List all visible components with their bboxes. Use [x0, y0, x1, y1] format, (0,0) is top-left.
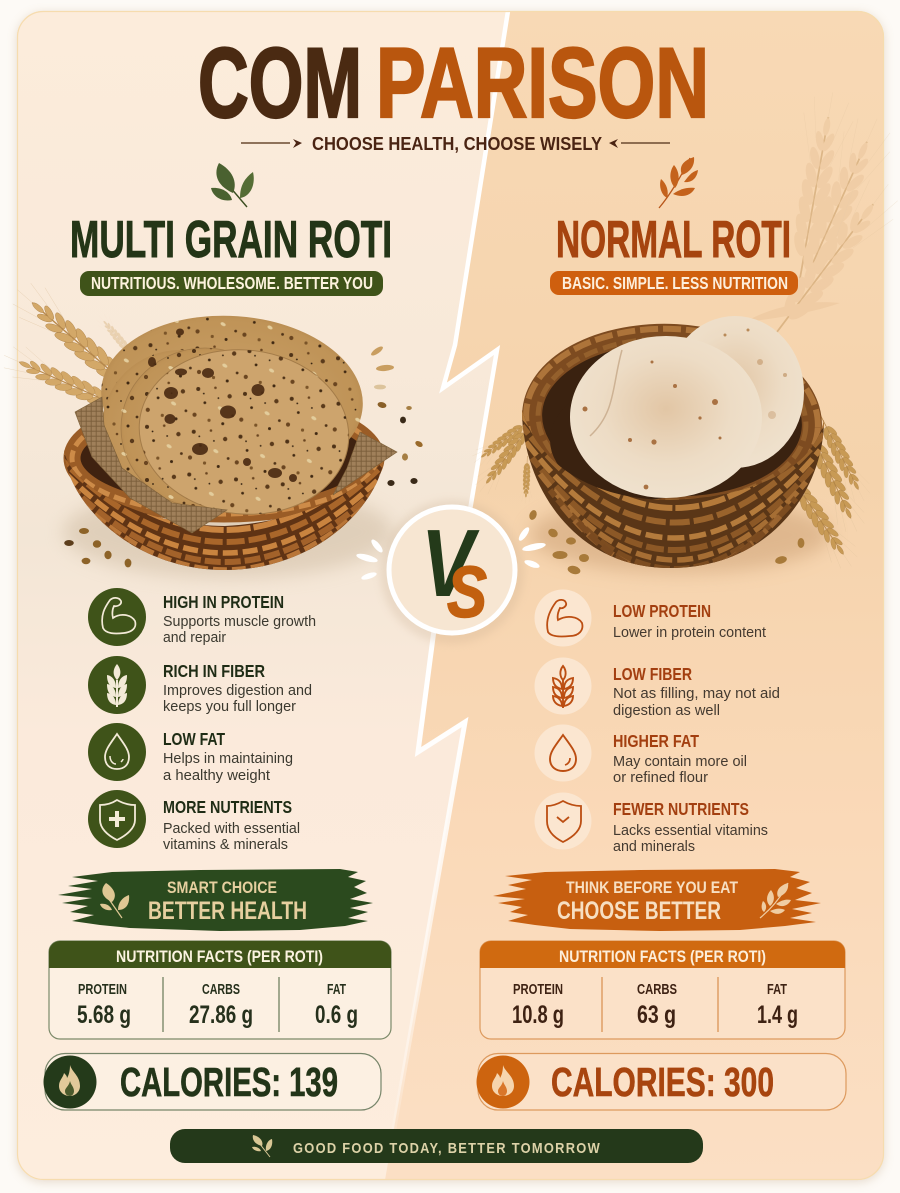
table: multi grain nutrition facts: FAT	[327, 982, 346, 998]
icon: banner sprig	[760, 883, 791, 918]
benefit: more nutrients: vitamins & minerals	[163, 837, 288, 853]
calories: multi grain: CALORIES: 139	[120, 1059, 338, 1105]
tagline pill: multi grain	[80, 271, 383, 296]
table: normal roti nutrition facts: 63 g	[637, 1001, 676, 1029]
benefit: high in protein: and repair	[163, 630, 226, 646]
table: multi grain nutrition facts: 5.68 g	[77, 1001, 131, 1029]
table: multi grain nutrition facts: 0.6 g	[315, 1001, 358, 1029]
benefit: more nutrients: MORE NUTRIENTS	[163, 797, 292, 817]
drawback: low fiber	[534, 658, 780, 719]
tagline pill: normal	[550, 271, 798, 295]
wheat stalks: left	[0, 275, 147, 423]
banner: choose better: THINK BEFORE YOU EAT	[566, 879, 738, 897]
benefit: low fat: LOW FAT	[163, 729, 225, 749]
icon: flame	[59, 1065, 80, 1096]
title: PARISON	[376, 27, 709, 138]
benefit: high in protein: HIGH IN PROTEIN	[163, 592, 284, 612]
drawback: low fiber: Not as filling, may not aid	[613, 686, 780, 702]
table: normal roti nutrition facts: 1.4 g	[757, 1001, 798, 1029]
scattered seeds	[64, 345, 424, 567]
subtitle: CHOOSE HEALTH, CHOOSE WISELY	[312, 134, 602, 154]
table: normal roti nutrition facts: 10.8 g	[512, 1001, 564, 1029]
panel: left background	[17, 11, 508, 1180]
calories: normal: CALORIES: 300	[551, 1059, 774, 1105]
table: normal roti nutrition facts: NUTRITION FACTS (PER ROTI)	[559, 947, 766, 966]
benefit: low fat: Helps in maintaining	[163, 751, 293, 767]
banner: better health: BETTER HEALTH	[148, 897, 307, 925]
drawback: higher fat: May contain more oil	[613, 754, 747, 770]
icon: banner leaf	[100, 883, 129, 918]
benefit: rich in fiber: keeps you full longer	[163, 699, 296, 715]
illustration: normal roti basket	[469, 316, 875, 577]
table: normal roti nutrition facts	[480, 941, 845, 1039]
table: normal roti nutrition facts: PROTEIN	[513, 982, 563, 998]
illustration: multi grain roti basket	[0, 275, 424, 582]
banner: choose better	[493, 869, 821, 931]
basket back	[519, 318, 825, 522]
panel: multi grain benefits	[88, 588, 316, 853]
drawback: low fiber: digestion as well	[613, 703, 720, 719]
background wheat: right	[745, 88, 900, 357]
tagline pill: multi grain: NUTRITIOUS. WHOLESOME. BETTER YOU	[91, 273, 373, 293]
drawback: fewer nutrients	[534, 792, 768, 855]
icon: footer leaf	[252, 1135, 272, 1157]
icon: flame	[492, 1065, 514, 1096]
table: multi grain nutrition facts: NUTRITION FACTS (PER ROTI)	[116, 947, 323, 966]
benefit: rich in fiber: Improves digestion and	[163, 683, 312, 699]
banner: better health	[58, 869, 373, 931]
benefit: rich in fiber: RICH IN FIBER	[163, 661, 265, 681]
burn spots	[148, 328, 297, 482]
benefit: low fat: a healthy weight	[163, 768, 270, 784]
benefit: rich in fiber	[88, 656, 312, 715]
table: multi grain nutrition facts: CARBS	[202, 982, 240, 998]
basket front	[64, 450, 384, 570]
drawback: fewer nutrients: Lacks essential vitamins	[613, 823, 768, 839]
benefit: high in protein: Supports muscle growth	[163, 614, 316, 630]
basket back	[72, 402, 376, 514]
banner: better health: SMART CHOICE	[167, 879, 277, 897]
soft rotis	[570, 316, 804, 498]
benefit: more nutrients	[88, 790, 300, 853]
benefit: high in protein	[88, 588, 316, 646]
title: COM	[198, 27, 362, 138]
drawback: low protein: Lower in protein content	[613, 625, 766, 641]
sparks	[356, 526, 546, 581]
drawback: low protein	[534, 590, 766, 646]
lightning divider	[385, 11, 508, 1180]
heading: multi grain roti: MULTI GRAIN ROTI	[70, 211, 392, 269]
cloth	[75, 397, 397, 533]
title	[198, 27, 709, 138]
wheat stalks: right	[469, 408, 875, 574]
scattered grains	[528, 509, 804, 576]
drawback: higher fat: HIGHER FAT	[613, 731, 699, 751]
drawback: fewer nutrients: FEWER NUTRIENTS	[613, 799, 749, 819]
benefit: more nutrients: Packed with essential	[163, 821, 300, 837]
tagline pill: normal: BASIC. SIMPLE. LESS NUTRITION	[562, 273, 788, 293]
table: multi grain nutrition facts: 27.86 g	[189, 1001, 253, 1029]
table: multi grain nutrition facts	[49, 941, 391, 1039]
VS badge: S	[447, 553, 487, 633]
drawback: low fiber: LOW FIBER	[613, 664, 692, 684]
panel: normal roti drawbacks	[534, 590, 780, 855]
drawback: low protein: LOW PROTEIN	[613, 601, 711, 621]
drawback: higher fat	[534, 724, 747, 786]
table: multi grain nutrition facts: PROTEIN	[78, 982, 127, 998]
VS badge: V	[421, 510, 480, 617]
banner: choose better: CHOOSE BETTER	[557, 897, 721, 925]
drawback: higher fat: or refined flour	[613, 770, 708, 786]
benefit: low fat	[88, 723, 293, 784]
calories: multi grain	[44, 1054, 381, 1110]
footer banner: GOOD FOOD TODAY, BETTER TOMORROW	[293, 1140, 601, 1157]
calories: normal	[476, 1054, 846, 1110]
table: normal roti nutrition facts: FAT	[767, 982, 787, 998]
table: normal roti nutrition facts: CARBS	[637, 982, 677, 998]
basket front	[522, 410, 824, 568]
icon: green leaf sprig	[211, 163, 254, 207]
rotis stack	[96, 307, 368, 525]
VS badge	[356, 500, 546, 644]
footer banner	[170, 1129, 703, 1163]
drawback: fewer nutrients: and minerals	[613, 839, 695, 855]
icon: orange leaf sprig	[659, 157, 698, 208]
